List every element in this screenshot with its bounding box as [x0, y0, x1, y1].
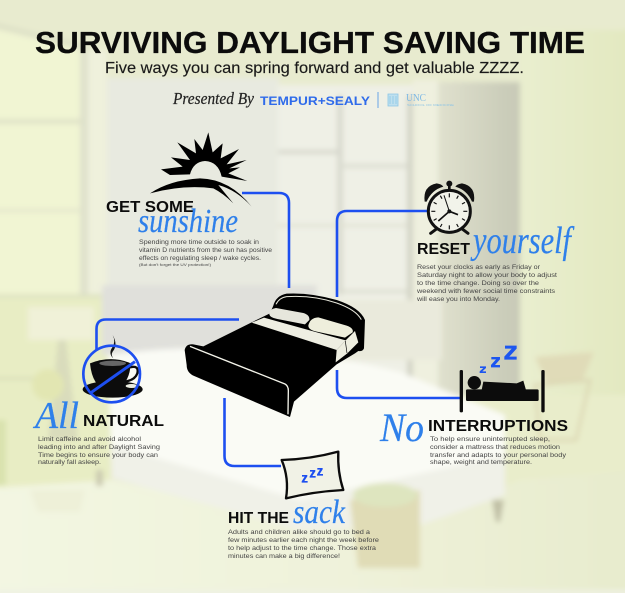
body text: naturally fall asleep.	[38, 459, 101, 466]
panel: no interruptions	[379, 346, 568, 466]
heading: GET SOME	[106, 199, 194, 216]
body text: weekend with fewer social time constraints	[416, 288, 555, 295]
script word: sack	[293, 494, 346, 531]
body text: transfer and adapts to your personal body	[430, 452, 567, 459]
presented by: Presented By	[172, 89, 254, 108]
icon: bed	[185, 293, 365, 417]
body text	[416, 264, 557, 303]
body text: Adults and children alike should go to bed a	[228, 529, 371, 536]
heading: INTERRUPTIONS	[428, 418, 568, 435]
script word: sunshine	[138, 203, 238, 240]
title: SURVIVING DAYLIGHT SAVING TIME	[35, 25, 585, 60]
heading: RESET	[417, 241, 470, 258]
script word: No	[379, 405, 424, 450]
body text	[139, 239, 272, 267]
body text: effects on regulating sleep / wake cycles.	[139, 255, 261, 262]
connector: interruptions to bed	[337, 370, 461, 398]
panel: get some sunshine	[106, 132, 272, 267]
connector: sack to bed	[224, 398, 281, 466]
icon: sleeping person	[460, 346, 545, 412]
body text	[38, 436, 161, 466]
body text: Limit caffeine and avoid alcohol	[38, 436, 141, 443]
logo: UNC wordmark: UNC	[406, 92, 426, 104]
body text: Saturday night to allow your body to adjust	[417, 272, 557, 279]
body text: (But don't forget the UV protection!)	[139, 263, 211, 267]
body text	[430, 436, 567, 466]
connector: reset to bed	[337, 211, 427, 297]
body text: Time begins to ensure your body can	[38, 452, 158, 459]
connector: natural to bed	[96, 320, 239, 350]
body text: will ease you into Monday.	[416, 296, 500, 303]
body text: minutes can make a big difference!	[228, 553, 340, 560]
panel: hit the sack	[228, 452, 379, 560]
body text: shape, weight and temperature.	[430, 459, 532, 466]
icon: no coffee	[83, 335, 143, 402]
body text	[228, 529, 379, 560]
logo: UNC building	[388, 94, 398, 106]
panel: reset yourself	[416, 181, 575, 303]
body text: consider a mattress that reduces motion	[430, 444, 561, 451]
body text: To help ensure uninterrupted sleep,	[430, 436, 550, 443]
body text: leading into and after Daylight Saving	[38, 444, 161, 451]
sponsor row	[172, 89, 454, 108]
icon: pillow	[282, 452, 343, 498]
icon: sun	[150, 132, 252, 207]
heading: NATURAL	[83, 413, 164, 430]
script word: All	[32, 395, 79, 437]
body text: Spending more time outside to soak in	[139, 239, 259, 246]
panel: all natural	[32, 335, 164, 466]
icon: alarm clock	[424, 181, 474, 233]
divider	[378, 92, 379, 108]
script word: yourself	[470, 220, 575, 262]
body text: vitamin D nutrients from the sun has positive	[139, 247, 272, 254]
body text: to help adjust to the time change. Those extra	[228, 545, 376, 552]
connector: sunshine to bed	[242, 193, 289, 288]
logo: Tempur Sealy: TEMPUR+SEALY	[260, 94, 370, 108]
body text: Reset your clocks as early as Friday or	[417, 264, 541, 271]
body text: few minutes earlier each night the week before	[228, 537, 379, 544]
heading: HIT THE	[228, 510, 289, 527]
subtitle: Five ways you can spring forward and get valuable ZZZZ.	[105, 60, 524, 77]
logo: UNC subline: SCHOOL OF MEDICINE	[407, 103, 454, 107]
body text: to the time change. Doing so over the	[417, 280, 539, 287]
